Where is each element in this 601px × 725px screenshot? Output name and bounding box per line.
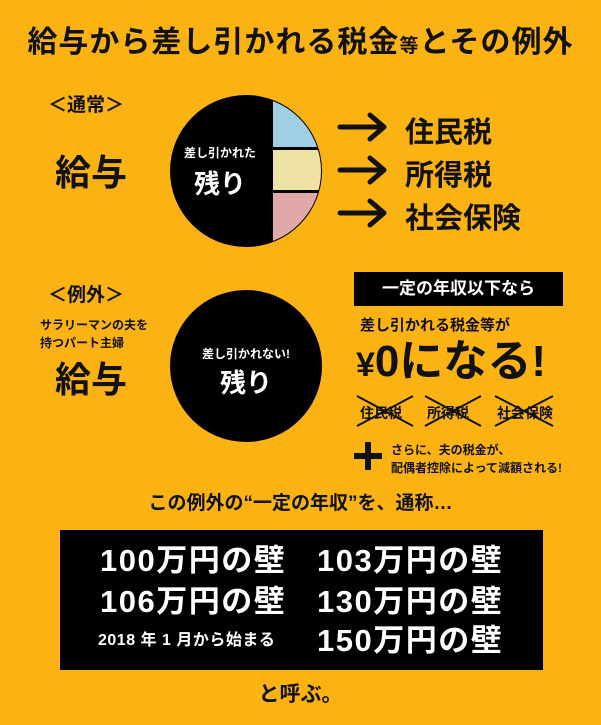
tax labels: 所得税: [405, 160, 492, 192]
box: income condition: 一定の年収以下なら: [382, 279, 535, 298]
label: exception: ＜例外＞: [48, 285, 124, 306]
label: salary normal: 給与: [55, 152, 127, 193]
circle: exception: 残り: [220, 368, 272, 398]
crossed taxes: 所得税: [427, 405, 469, 421]
pie chart: normal: 差し引かれた: [184, 145, 256, 160]
box: income condition: [354, 272, 563, 306]
circle: exception: [170, 290, 322, 442]
arrows: [338, 112, 386, 228]
label: salary exception: 給与: [55, 359, 127, 400]
headline: zero: ¥0になる!: [356, 337, 546, 386]
box: income walls: [60, 530, 543, 670]
crossed taxes: [356, 395, 554, 427]
text: part-time wife: 持つパート主婦: [40, 336, 124, 350]
box: income walls: 103万円の壁: [317, 543, 503, 578]
icon: plus: [354, 442, 382, 470]
pie chart: normal: 残り: [194, 169, 246, 199]
box: income walls: 150万円の壁: [317, 623, 503, 658]
text: spouse deduction: さらに、夫の税金が、: [391, 443, 510, 457]
box: income walls: 100万円の壁: [100, 543, 286, 578]
tax labels: 住民税: [405, 117, 492, 149]
box: income walls: 106万円の壁: [100, 584, 286, 619]
pie chart: normal: [170, 95, 322, 247]
text: part-time wife: サラリーマンの夫を: [40, 318, 148, 332]
tax labels: [405, 117, 521, 235]
text: spouse deduction: 配偶者控除によって減額される!: [391, 461, 562, 475]
label: normal: ＜通常＞: [48, 95, 124, 116]
text: spouse deduction: [391, 443, 562, 475]
subheading: この例外の“一定の年収”を、通称…: [148, 493, 452, 514]
text: called: と呼ぶ。: [258, 683, 342, 706]
crossed taxes: 社会保険: [497, 405, 553, 421]
title: 給与から差し引かれる税金等とその例外: [27, 26, 574, 59]
box: income walls: 2018 年 1 月から始まる: [98, 632, 275, 649]
circle: exception: 差し引かれない!: [202, 346, 290, 361]
crossed taxes: 住民税: [360, 405, 402, 421]
box: income walls: 130万円の壁: [317, 584, 503, 619]
tax labels: 社会保険: [405, 203, 521, 235]
text: part-time wife: [40, 318, 148, 350]
text: taxes become zero: 差し引かれる税金等が: [360, 317, 510, 334]
